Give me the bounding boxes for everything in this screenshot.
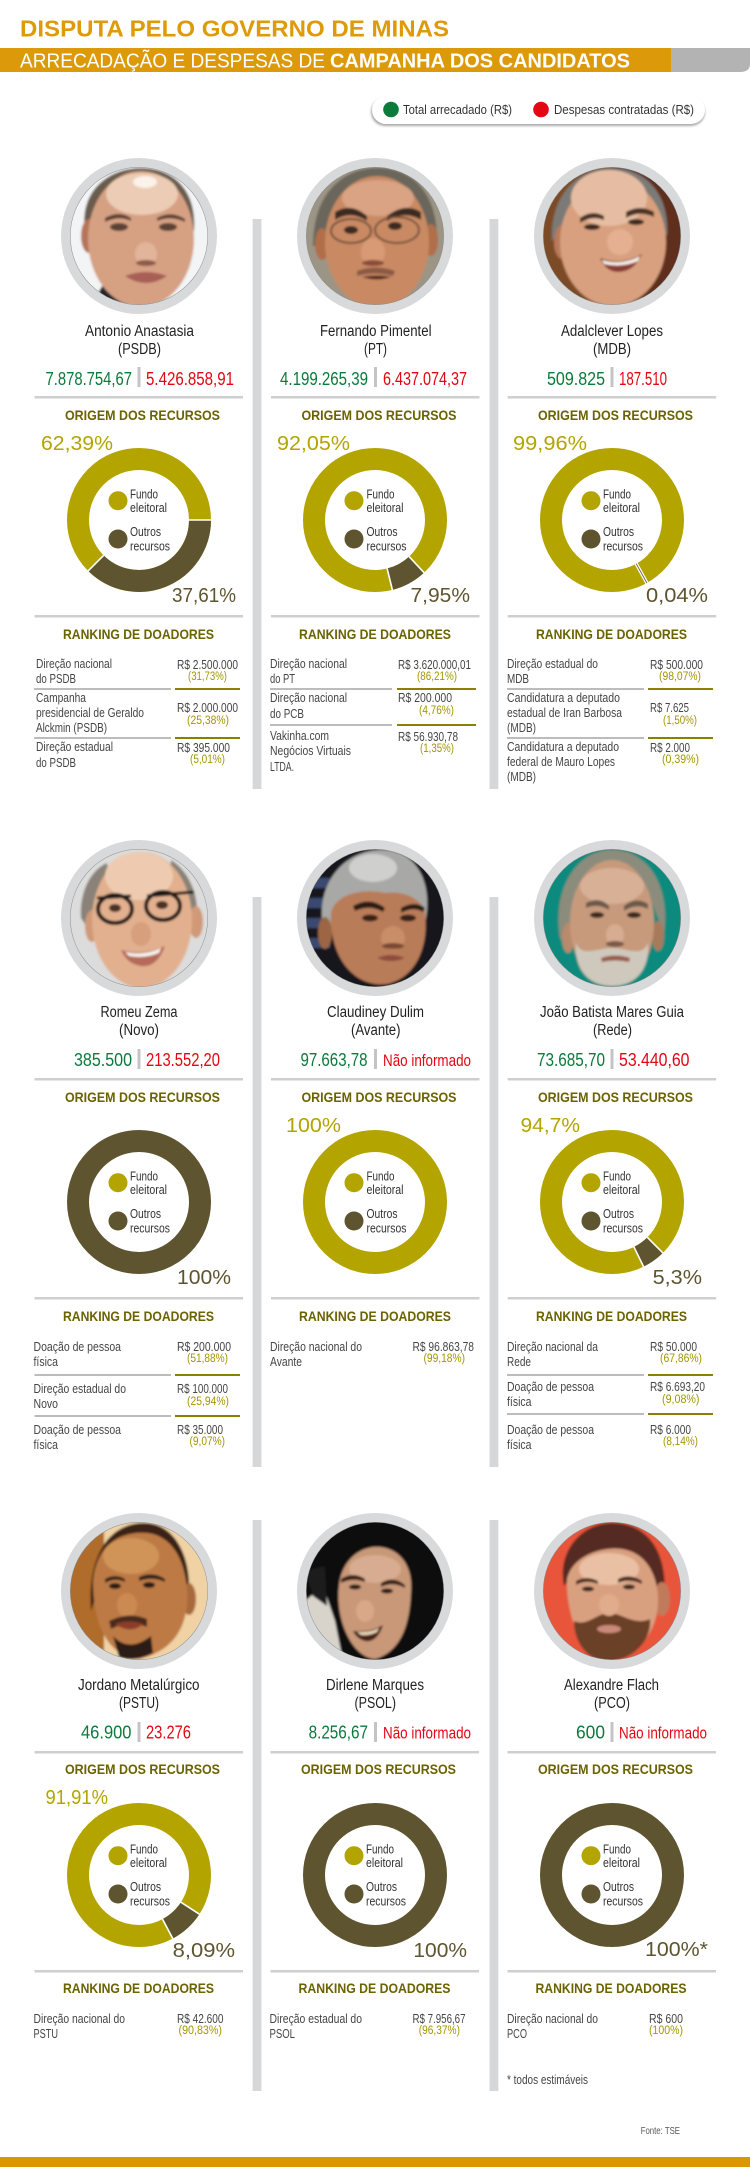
amounts: 53.440,60 xyxy=(619,1050,690,1070)
table: donors: (9,08%) xyxy=(662,1394,700,1406)
photo: Jordano Metalúrgico xyxy=(61,1513,217,1669)
table: donors: PSOL xyxy=(270,2027,295,2041)
table: donors: (25,38%) xyxy=(187,715,229,727)
donut chart xyxy=(277,433,470,607)
amounts xyxy=(309,1722,471,1742)
table: donors: Direção nacional xyxy=(36,657,112,671)
heading: origem dos recursos: ORIGEM DOS RECURSOS xyxy=(301,1761,456,1777)
table: donors: R$ 6.693,20 xyxy=(650,1380,705,1394)
table: donors: (25,94%) xyxy=(187,1396,229,1408)
table: donors: (5,01%) xyxy=(190,754,225,766)
party: (Rede) xyxy=(593,1022,632,1039)
donut chart: eleitoral xyxy=(603,501,640,515)
table: donors: Novo xyxy=(34,1397,58,1411)
table: donors: física xyxy=(34,1438,58,1452)
heading: ranking de doadores: RANKING DE DOADORES xyxy=(298,1980,450,1996)
table: donors: (100%) xyxy=(649,2025,683,2037)
table: donors xyxy=(34,2012,224,2041)
party: (PSTU) xyxy=(119,1695,159,1712)
table: donors: R$ 100.000 xyxy=(177,1382,228,1396)
table: donors: Doação de pessoa xyxy=(34,1340,121,1354)
name: Claudiney Dulim xyxy=(327,1004,424,1021)
amounts: 213.552,20 xyxy=(146,1050,220,1070)
amounts: 5.426.858,91 xyxy=(146,369,234,389)
amounts: 7.878.754,67 xyxy=(46,369,132,389)
donut chart: recursos xyxy=(603,1222,643,1236)
table: donors: (1,35%) xyxy=(420,743,454,755)
table: donors: (1,50%) xyxy=(663,715,697,727)
panel: Alexandre Flach xyxy=(507,1513,716,2087)
donut chart: 100% xyxy=(286,1115,341,1137)
amounts xyxy=(46,367,234,389)
footnote: * todos estimáveis xyxy=(507,2073,588,2087)
donut chart: 91,91% xyxy=(46,1787,108,1809)
donut chart xyxy=(551,1814,708,1961)
legend xyxy=(371,96,705,126)
table: donors: Direção estadual do xyxy=(34,1382,126,1396)
party: (Novo) xyxy=(119,1022,159,1039)
table: donors: (31,73%) xyxy=(188,671,227,683)
donut chart: Outros xyxy=(603,1880,634,1894)
table: donors xyxy=(34,657,240,770)
amounts: 73.685,70 xyxy=(537,1050,605,1070)
panel: Adalclever Lopes xyxy=(507,158,716,784)
table: donors: (67,86%) xyxy=(660,1353,702,1365)
table: donors: R$ 35.000 xyxy=(177,1423,223,1437)
donut chart: Outros xyxy=(366,1207,398,1221)
table: donors: Campanha xyxy=(36,691,86,705)
amounts: 509.825 xyxy=(547,369,605,389)
amounts xyxy=(81,1722,191,1742)
donut chart: Outros xyxy=(366,525,398,539)
donut chart: Outros xyxy=(130,1880,161,1894)
panel: Jordano Metalúrgico xyxy=(34,1513,243,2041)
heading: origem dos recursos: ORIGEM DOS RECURSOS xyxy=(65,1089,220,1105)
table: donors: (99,18%) xyxy=(424,1353,465,1365)
table: donors: R$ 50.000 xyxy=(650,1340,697,1354)
subtitle band xyxy=(0,48,750,72)
table: donors: LTDA. xyxy=(270,760,294,774)
donut chart: recursos xyxy=(603,540,643,554)
table: donors: (MDB) xyxy=(507,770,536,784)
heading: ranking de doadores: RANKING DE DOADORES xyxy=(299,626,451,642)
donut chart xyxy=(78,1141,231,1289)
heading: ranking de doadores: RANKING DE DOADORES xyxy=(63,1308,214,1324)
panel: João Batista Mares Guia xyxy=(507,840,716,1452)
table: donors: R$ 6.000 xyxy=(650,1423,691,1437)
table: donors xyxy=(270,1340,474,1369)
source: Fonte: TSE xyxy=(641,2126,680,2137)
table: donors: R$ 56.930,78 xyxy=(398,730,458,744)
donut chart: eleitoral xyxy=(603,1856,640,1870)
table: donors: Candidatura a deputado xyxy=(507,691,620,705)
panel: Romeu Zema xyxy=(34,840,243,1452)
donut chart: Outros xyxy=(130,1207,161,1221)
amounts xyxy=(280,367,467,389)
donut chart: Outros xyxy=(603,1207,634,1221)
donut chart: 7,95% xyxy=(410,585,470,607)
table: donors: (51,88%) xyxy=(187,1353,228,1365)
donut chart: 0,04% xyxy=(646,585,708,607)
table: donors: R$ 2.000 xyxy=(650,741,690,755)
donut chart xyxy=(520,1115,702,1289)
table: donors: (96,37%) xyxy=(419,2025,460,2037)
table: donors: do PSDB xyxy=(36,756,76,770)
amounts: Não informado xyxy=(383,1052,471,1070)
table: donors: R$ 2.500.000 xyxy=(177,658,238,672)
table: donors: do PCB xyxy=(270,707,304,721)
donut chart: eleitoral xyxy=(366,1183,404,1197)
donut chart: eleitoral xyxy=(366,501,404,515)
amounts xyxy=(74,1049,220,1070)
name: João Batista Mares Guia xyxy=(540,1004,684,1021)
table: donors: física xyxy=(507,1438,532,1452)
table: donors xyxy=(270,2012,466,2041)
party: (PSDB) xyxy=(118,341,161,358)
donut chart: 100%* xyxy=(645,1939,708,1961)
photo: Dirlene Marques xyxy=(297,1513,453,1669)
name: Antonio Anastasia xyxy=(85,323,194,340)
donut chart: Outros xyxy=(130,525,161,539)
amounts: 8.256,67 xyxy=(309,1722,368,1742)
table: donors: (MDB) xyxy=(507,721,536,735)
donut chart: 100% xyxy=(413,1940,467,1962)
donut chart: eleitoral xyxy=(603,1183,640,1197)
table: donors: Alckmin (PSDB) xyxy=(36,721,107,735)
subtitle band: CAMPANHA DOS CANDIDATOS xyxy=(330,50,630,72)
name: Romeu Zema xyxy=(100,1004,178,1021)
donut chart: 8,09% xyxy=(173,1940,235,1962)
donut chart: 100% xyxy=(177,1267,231,1289)
photo: Fernando Pimentel xyxy=(297,158,453,314)
donut chart: 92,05% xyxy=(277,433,350,455)
amounts: 6.437.074,37 xyxy=(383,369,467,389)
table: donors: Doação de pessoa xyxy=(507,1380,594,1394)
donut chart xyxy=(46,1787,235,1962)
name: Alexandre Flach xyxy=(564,1677,659,1694)
name: Fernando Pimentel xyxy=(320,323,432,340)
table: donors xyxy=(507,657,713,784)
heading: origem dos recursos: ORIGEM DOS RECURSOS xyxy=(65,1761,220,1777)
table: donors: R$ 42.600 xyxy=(177,2012,224,2026)
donut chart: recursos xyxy=(366,1222,406,1236)
party: (PSOL) xyxy=(354,1695,396,1712)
table: donors: PCO xyxy=(507,2027,527,2041)
donut chart: eleitoral xyxy=(130,501,167,515)
table: donors: R$ 500.000 xyxy=(650,658,703,672)
table: donors: Vakinha.com xyxy=(270,729,329,743)
table: donors: (8,14%) xyxy=(663,1436,698,1448)
heading: origem dos recursos: ORIGEM DOS RECURSOS xyxy=(65,407,220,423)
amounts: 4.199.265,39 xyxy=(280,369,368,389)
table: donors xyxy=(507,2012,683,2041)
amounts xyxy=(576,1722,707,1742)
donut chart: Fundo xyxy=(366,1843,394,1857)
donut chart: 99,96% xyxy=(513,433,587,455)
photo: Claudiney Dulim xyxy=(297,840,453,996)
table: donors: Direção nacional do xyxy=(507,2012,598,2026)
legend: Despesas contratadas (R$) xyxy=(554,102,694,117)
table: donors: (98,07%) xyxy=(659,671,701,683)
donut chart: Fundo xyxy=(603,488,631,502)
heading: origem dos recursos: ORIGEM DOS RECURSOS xyxy=(538,1761,693,1777)
party: (PCO) xyxy=(594,1695,630,1712)
donut chart: Fundo xyxy=(603,1843,631,1857)
panel: Dirlene Marques xyxy=(270,1513,479,2041)
table: donors: Rede xyxy=(507,1355,531,1369)
photo: Antonio Anastasia xyxy=(61,158,217,314)
heading: origem dos recursos: ORIGEM DOS RECURSOS xyxy=(302,1089,456,1105)
heading: ranking de doadores: RANKING DE DOADORES xyxy=(63,1980,214,1996)
amounts xyxy=(537,1049,690,1070)
party: (MDB) xyxy=(593,341,631,358)
subtitle band: ARRECADAÇÃO E DESPESAS DE xyxy=(20,48,325,72)
table: donors: Direção nacional do xyxy=(34,2012,125,2026)
table: donors: R$ 96.863,78 xyxy=(412,1340,474,1354)
panel: Antonio Anastasia xyxy=(34,158,243,770)
amounts: 46.900 xyxy=(81,1722,132,1742)
table: donors: Candidatura a deputado xyxy=(507,740,619,754)
amounts: Não informado xyxy=(383,1724,471,1742)
donut chart: Fundo xyxy=(366,1170,395,1184)
donut chart: recursos xyxy=(603,1895,643,1909)
table: donors: Doação de pessoa xyxy=(507,1423,594,1437)
table: donors: Direção estadual xyxy=(36,740,113,754)
table: donors: (4,76%) xyxy=(419,705,454,717)
amounts: 23.276 xyxy=(146,1722,191,1742)
table: donors: R$ 2.000.000 xyxy=(177,701,238,715)
donut chart: 5,3% xyxy=(653,1267,702,1289)
table: donors: Doação de pessoa xyxy=(34,1423,121,1437)
table: donors: Direção estadual do xyxy=(507,657,598,671)
amounts: 385.500 xyxy=(74,1050,132,1070)
donut chart: Fundo xyxy=(603,1170,631,1184)
column dividers row 3 xyxy=(253,1520,498,2091)
table: donors xyxy=(34,1340,240,1452)
donut chart: recursos xyxy=(366,1895,406,1909)
table: donors: (0,39%) xyxy=(662,754,699,766)
donut chart: 94,7% xyxy=(520,1115,580,1137)
amounts xyxy=(547,367,667,389)
table: donors: Direção nacional xyxy=(270,691,347,705)
table: donors: Avante xyxy=(270,1355,302,1369)
table: donors: R$ 200.000 xyxy=(177,1340,231,1354)
heading: origem dos recursos: ORIGEM DOS RECURSOS xyxy=(538,407,693,423)
donut chart: Outros xyxy=(366,1880,397,1894)
table: donors xyxy=(270,657,476,774)
donut chart: eleitoral xyxy=(130,1183,167,1197)
table: donors: Direção nacional xyxy=(270,657,347,671)
table: donors: do PSDB xyxy=(36,672,76,686)
title: DISPUTA PELO GOVERNO DE MINAS xyxy=(20,16,449,42)
donut chart: recursos xyxy=(130,540,170,554)
photo: Romeu Zema xyxy=(61,840,217,996)
table: donors: R$ 7.625 xyxy=(650,701,689,715)
donut chart xyxy=(314,1814,467,1962)
photo: João Batista Mares Guia xyxy=(534,840,690,996)
party: (PT) xyxy=(364,341,387,358)
amounts xyxy=(300,1049,471,1070)
table: donors: (86,21%) xyxy=(417,671,457,683)
table: donors: física xyxy=(507,1395,532,1409)
amounts: 187.510 xyxy=(619,369,667,389)
table: donors: Direção estadual do xyxy=(270,2012,362,2026)
donut chart: eleitoral xyxy=(130,1856,167,1870)
heading: ranking de doadores: RANKING DE DOADORES xyxy=(536,1308,687,1324)
donut chart: Fundo xyxy=(130,1843,158,1857)
table: donors: Direção nacional da xyxy=(507,1340,598,1354)
heading: origem dos recursos: ORIGEM DOS RECURSOS xyxy=(302,407,456,423)
donut chart xyxy=(286,1115,436,1263)
name: Dirlene Marques xyxy=(326,1677,424,1694)
table: donors: Direção nacional do xyxy=(270,1340,362,1354)
donut chart: eleitoral xyxy=(366,1856,403,1870)
heading: ranking de doadores: RANKING DE DOADORES xyxy=(63,626,214,642)
table: donors: R$ 3.620.000,01 xyxy=(398,658,471,672)
table: donors xyxy=(507,1340,713,1452)
donut chart: recursos xyxy=(130,1895,170,1909)
donut chart xyxy=(41,433,236,607)
table: donors: federal de Mauro Lopes xyxy=(507,755,615,769)
panel: Fernando Pimentel xyxy=(270,158,480,774)
column dividers row 1 xyxy=(253,219,498,789)
donut chart: Fundo xyxy=(130,1170,158,1184)
photo: Alexandre Flach xyxy=(534,1513,690,1669)
amounts: 97.663,78 xyxy=(300,1050,368,1070)
table: donors: MDB xyxy=(507,672,529,686)
photo: Adalclever Lopes xyxy=(534,158,690,314)
table: donors: (90,83%) xyxy=(178,2025,222,2037)
heading: origem dos recursos: ORIGEM DOS RECURSOS xyxy=(538,1089,693,1105)
donut chart: Outros xyxy=(603,525,634,539)
panel: Claudiney Dulim xyxy=(270,840,480,1369)
table: donors: (9,07%) xyxy=(190,1436,225,1448)
table: donors: R$ 200.000 xyxy=(398,691,452,705)
table: donors: PSTU xyxy=(34,2027,58,2041)
heading: ranking de doadores: RANKING DE DOADORES xyxy=(536,626,687,642)
table: donors: do PT xyxy=(270,672,295,686)
column dividers row 2 xyxy=(253,897,498,1467)
table: donors: física xyxy=(34,1355,58,1369)
bottom bar xyxy=(0,2157,750,2167)
donut chart: Fundo xyxy=(366,488,395,502)
heading: ranking de doadores: RANKING DE DOADORES xyxy=(299,1308,451,1324)
party: (Avante) xyxy=(351,1022,400,1039)
donut chart: recursos xyxy=(366,540,406,554)
donut chart: 62,39% xyxy=(41,433,113,455)
table: donors: R$ 395.000 xyxy=(177,741,230,755)
donut chart: recursos xyxy=(130,1222,170,1236)
heading: ranking de doadores: RANKING DE DOADORES xyxy=(536,1980,686,1996)
legend: Total arrecadado (R$) xyxy=(403,102,512,117)
name: Adalclever Lopes xyxy=(561,323,663,340)
amounts: 600 xyxy=(576,1722,605,1742)
table: donors: R$ 600 xyxy=(649,2012,683,2026)
table: donors: estadual de Iran Barbosa xyxy=(507,706,622,720)
name: Jordano Metalúrgico xyxy=(78,1677,200,1694)
donut chart xyxy=(513,433,708,607)
donut chart: Fundo xyxy=(130,488,158,502)
amounts: Não informado xyxy=(619,1724,707,1742)
table: donors: presidencial de Geraldo xyxy=(36,706,144,720)
donut chart: 37,61% xyxy=(172,585,236,607)
table: donors: Negócios Virtuais xyxy=(270,744,351,758)
table: donors: R$ 7.956,67 xyxy=(412,2012,466,2026)
